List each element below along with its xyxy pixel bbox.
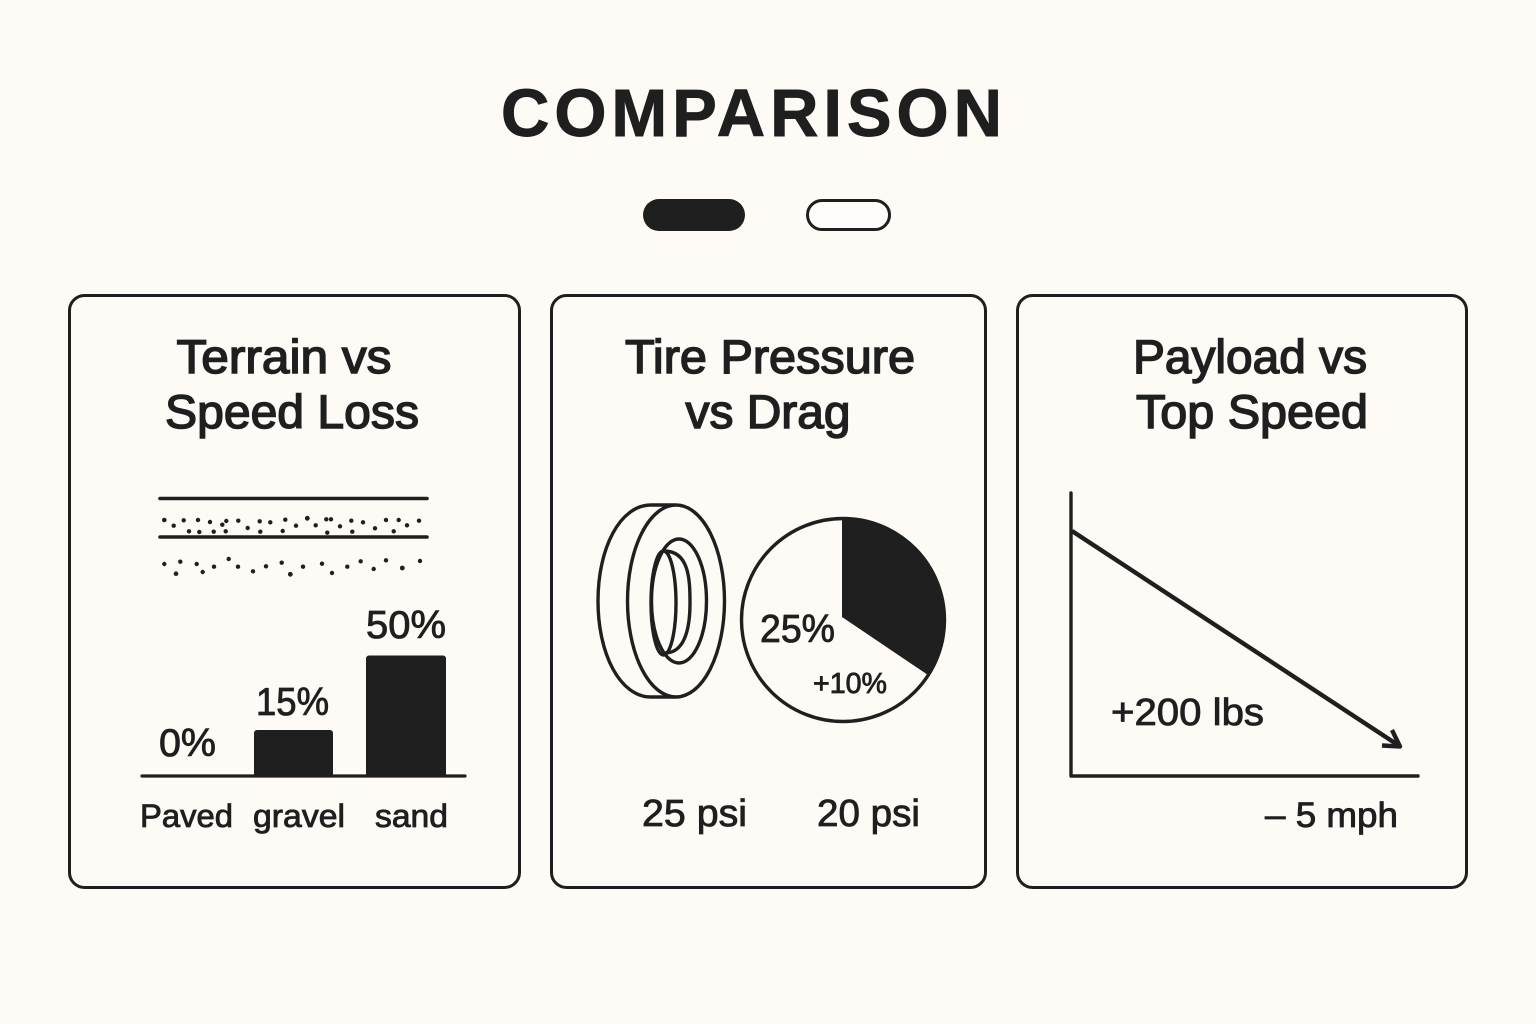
- category labels: gravel: [253, 798, 345, 834]
- speed label: – 5 mph: [1265, 796, 1398, 835]
- panel heading: Top Speed: [1136, 385, 1368, 438]
- chart axes: [1071, 493, 1418, 776]
- category labels: [140, 798, 448, 834]
- filled pill: [643, 199, 745, 231]
- bar chart baseline: [142, 774, 465, 778]
- panel heading: Speed Loss: [165, 385, 419, 438]
- panel frame: [1018, 296, 1466, 888]
- panel heading: [165, 330, 419, 438]
- pie wedge: [842, 518, 944, 675]
- pressure labels: 20 psi: [817, 793, 920, 835]
- bar: gravel: [254, 730, 333, 776]
- arrow: downward trend: [1072, 531, 1400, 746]
- pressure labels: [642, 793, 920, 835]
- pie label: +10%: +10%: [813, 668, 887, 700]
- panel: tire pressure vs drag: [552, 296, 986, 888]
- title: COMPARISON: [501, 76, 1002, 151]
- pie chart: [742, 518, 944, 722]
- bar: sand: [366, 656, 446, 776]
- value labels: 50%: [366, 604, 446, 647]
- panel heading: [625, 330, 915, 438]
- value labels: 15%: [256, 681, 329, 724]
- value labels: [159, 604, 446, 765]
- panel frame: [70, 296, 520, 888]
- panel: terrain vs speed loss: [70, 296, 520, 888]
- payload label: +200 lbs: [1111, 692, 1264, 734]
- panel heading: Tire Pressure: [625, 330, 915, 383]
- terrain texture illustration: [160, 498, 427, 577]
- panel heading: Payload vs: [1133, 330, 1367, 383]
- panel heading: Terrain vs: [176, 330, 392, 383]
- bar chart: speed loss by surface: [140, 604, 465, 834]
- panel heading: vs Drag: [686, 385, 850, 438]
- category labels: sand: [375, 798, 448, 834]
- panel heading: [1133, 330, 1368, 438]
- icon: tire: [598, 505, 724, 697]
- panel frame: [552, 296, 986, 888]
- panel: payload vs top speed: [1018, 296, 1466, 888]
- pressure labels: 25 psi: [642, 793, 747, 835]
- outlined pill: [808, 200, 890, 230]
- value labels: 0%: [159, 722, 216, 765]
- line chart: payload vs speed: [1071, 493, 1418, 835]
- pie label: 25%: 25%: [760, 608, 835, 651]
- category labels: Paved: [140, 798, 233, 834]
- toggle indicators: [643, 199, 890, 231]
